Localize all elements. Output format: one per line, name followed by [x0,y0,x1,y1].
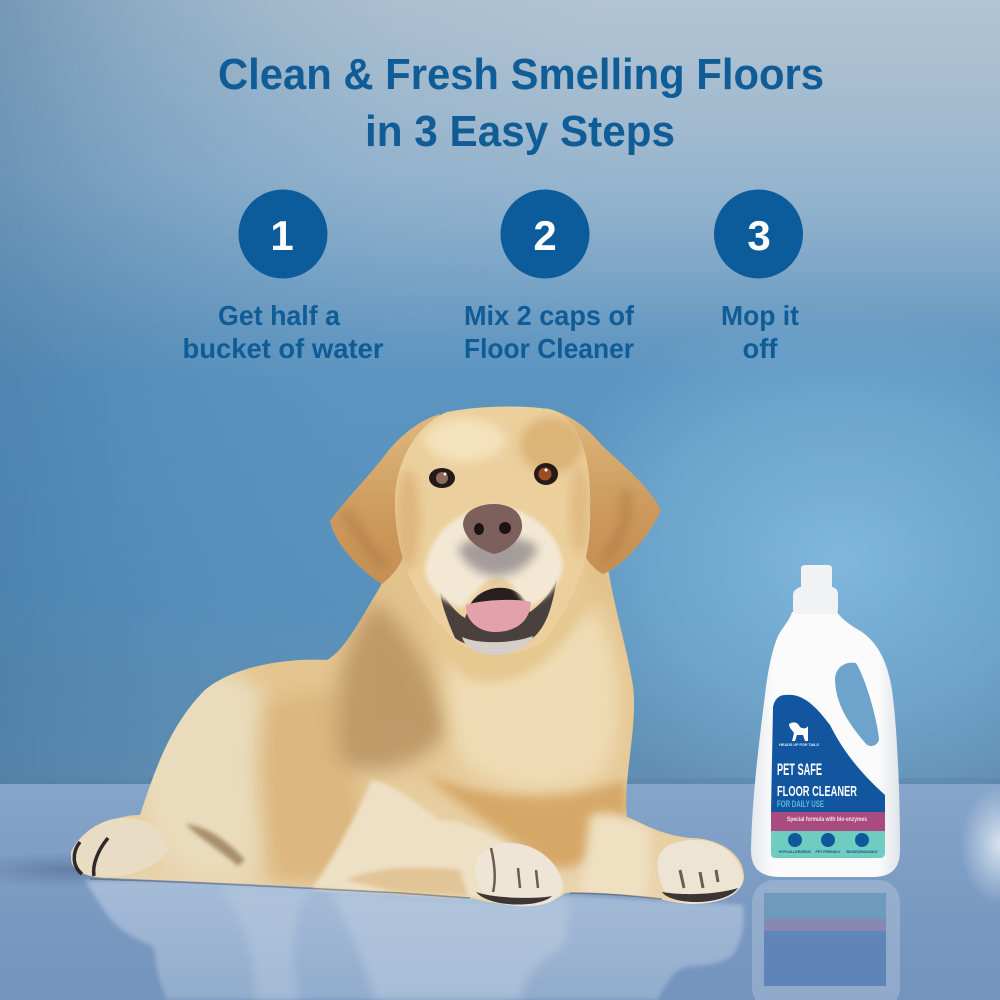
teal band labels [779,850,878,854]
front left leg [312,780,565,897]
body tonal shading [140,600,650,900]
teal band labels: HYPOALLERGENIC [779,850,812,854]
label title: FLOOR CLEANER [777,783,857,800]
title: Clean & Fresh Smelling Floors [218,50,824,99]
dog reflection on floor [85,880,744,1000]
label title: PET SAFE [777,760,822,779]
step 1 [182,190,384,364]
rear paw [71,818,168,877]
muzzle grey shading [458,537,538,576]
right ear [545,408,661,574]
right eye [534,463,558,485]
step 1: 1 [270,212,294,259]
right side fur [580,813,650,900]
golden retriever dog [71,406,744,906]
pink band text: Special formula with bio-enzymes [787,816,867,823]
front right leg and paw [657,840,743,904]
bottle reflection [752,880,900,1000]
step 3 [714,190,803,364]
label brand text: HEADS UP FOR TAILS [779,742,819,747]
lower lip [462,636,533,655]
teal band icons [788,833,869,847]
left ear [330,414,440,584]
belly orange fur [259,690,369,885]
front left paw [475,843,563,906]
step 2 [464,190,635,364]
forearm shade [345,868,468,896]
ear streaks [345,490,626,565]
title: in 3 Easy Steps [365,107,675,156]
label blue panel [771,695,885,812]
head [395,406,590,654]
head tonal shading [396,417,590,570]
chest light fur [447,600,620,789]
step 2: 2 [533,212,557,259]
label subheading: FOR DAILY USE [777,799,824,809]
nose [463,504,522,554]
step 2: Floor Cleaner [464,333,634,364]
rear crease [185,824,245,866]
cap [793,565,838,614]
open mouth [438,578,557,647]
shoulder brown fur [337,600,450,770]
step 3: 3 [747,212,771,259]
step 2: Mix 2 caps of [464,300,635,331]
label pink band [771,812,885,831]
teal band labels: PET FRIENDLY [816,850,841,854]
label teal band [771,831,885,858]
step 1: bucket of water [182,333,384,364]
product bottle [751,565,900,877]
step 1: Get half a [218,300,340,331]
dog body [71,540,744,905]
label dog logo [789,722,808,741]
title [218,50,824,156]
neck fur [410,540,590,682]
muzzle [425,505,563,607]
left eye [429,468,455,488]
reflective floor [0,784,1000,1000]
bottle handle cut-out [835,663,879,746]
step 3: off [742,333,778,364]
ground contact line [90,879,662,899]
haunch cream [140,670,272,879]
teal band labels: BIODEGRADABLE [847,850,878,854]
tongue [466,600,531,632]
bottle body [751,612,900,877]
step 3: Mop it [721,300,799,331]
label title [777,760,857,800]
